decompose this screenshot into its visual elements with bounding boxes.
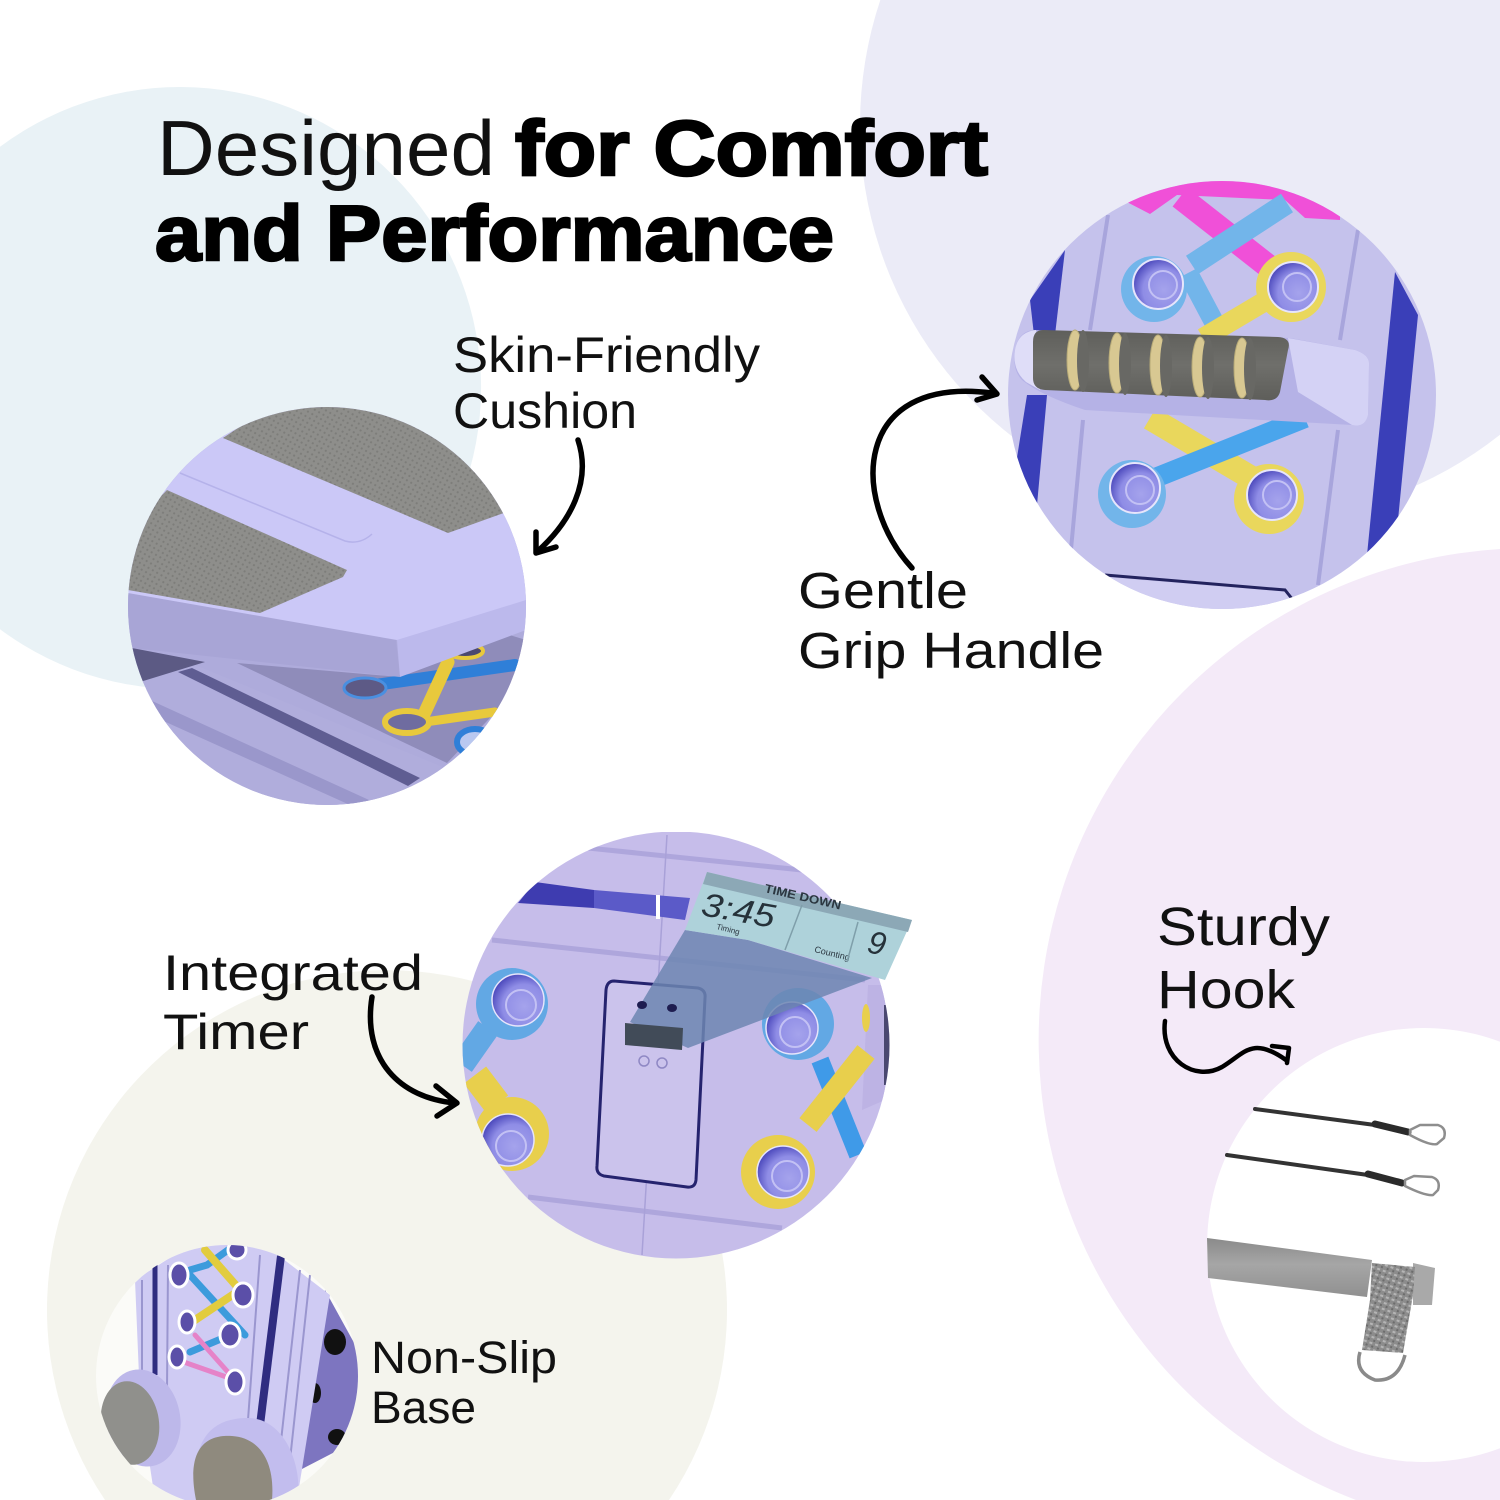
wrench markers	[344, 644, 515, 755]
label: gentle grip handle	[798, 562, 1104, 679]
label: non-slip base: Non-Slip	[371, 1332, 557, 1383]
straps	[178, 1250, 245, 1380]
wrench straps	[462, 968, 870, 1209]
cables with carabiners	[1227, 1109, 1445, 1195]
projection beam	[630, 930, 872, 1048]
timer buttons and screen	[625, 1001, 683, 1068]
label: sturdy hook: Hook	[1157, 960, 1296, 1020]
title: and Performance	[155, 189, 834, 277]
label: gentle grip handle: Grip Handle	[798, 622, 1104, 679]
title: Designed	[157, 104, 495, 192]
side channels	[1015, 215, 1418, 609]
handle bar with strap	[1207, 1238, 1435, 1380]
timer display callout: Counting	[814, 944, 851, 963]
label: skin-friendly cushion: Cushion	[453, 383, 637, 439]
label: gentle grip handle: Gentle	[798, 562, 968, 619]
label: non-slip base: Base	[371, 1382, 476, 1433]
arrow: cushion	[536, 440, 582, 553]
timer display callout: 9	[865, 924, 890, 963]
arrow: grip handle	[873, 377, 997, 568]
label: skin-friendly cushion: Skin-Friendly	[453, 327, 760, 383]
arrow: hook	[1165, 1021, 1289, 1072]
timer display callout	[685, 872, 912, 980]
back panel	[300, 1290, 358, 1470]
timer display callout: Timing	[716, 922, 741, 937]
panel: sturdy hook photo	[1207, 1109, 1445, 1380]
label: integrated timer: Timer	[163, 1004, 309, 1060]
timer display callout: TIME DOWN	[763, 881, 842, 912]
non-slip feet	[95, 1362, 299, 1500]
lower rails	[128, 633, 526, 805]
arrow: timer	[370, 997, 457, 1116]
panel: grip handle photo	[1008, 175, 1436, 609]
label: non-slip base	[371, 1332, 557, 1433]
label: integrated timer: Integrated	[163, 945, 423, 1001]
panel: non-slip base photo	[95, 1241, 358, 1500]
coloured wrench straps	[1098, 175, 1340, 534]
label: sturdy hook: Sturdy	[1157, 897, 1330, 957]
rails	[492, 835, 890, 1255]
timer body	[597, 981, 705, 1187]
device face	[135, 1245, 330, 1500]
holes	[482, 974, 818, 1198]
label: integrated timer	[163, 945, 423, 1060]
strap holes	[169, 1241, 253, 1394]
mounting holes	[1110, 259, 1318, 520]
cushion plate	[128, 400, 526, 677]
title: for Comfort	[515, 104, 988, 192]
timer display callout: 3:45	[699, 885, 779, 935]
panel: timer photo	[462, 832, 890, 1259]
label: skin-friendly cushion	[453, 327, 760, 439]
label: sturdy hook	[1157, 897, 1330, 1020]
title	[155, 104, 988, 277]
handle	[1014, 330, 1369, 426]
panel: cushion photo	[128, 400, 526, 805]
